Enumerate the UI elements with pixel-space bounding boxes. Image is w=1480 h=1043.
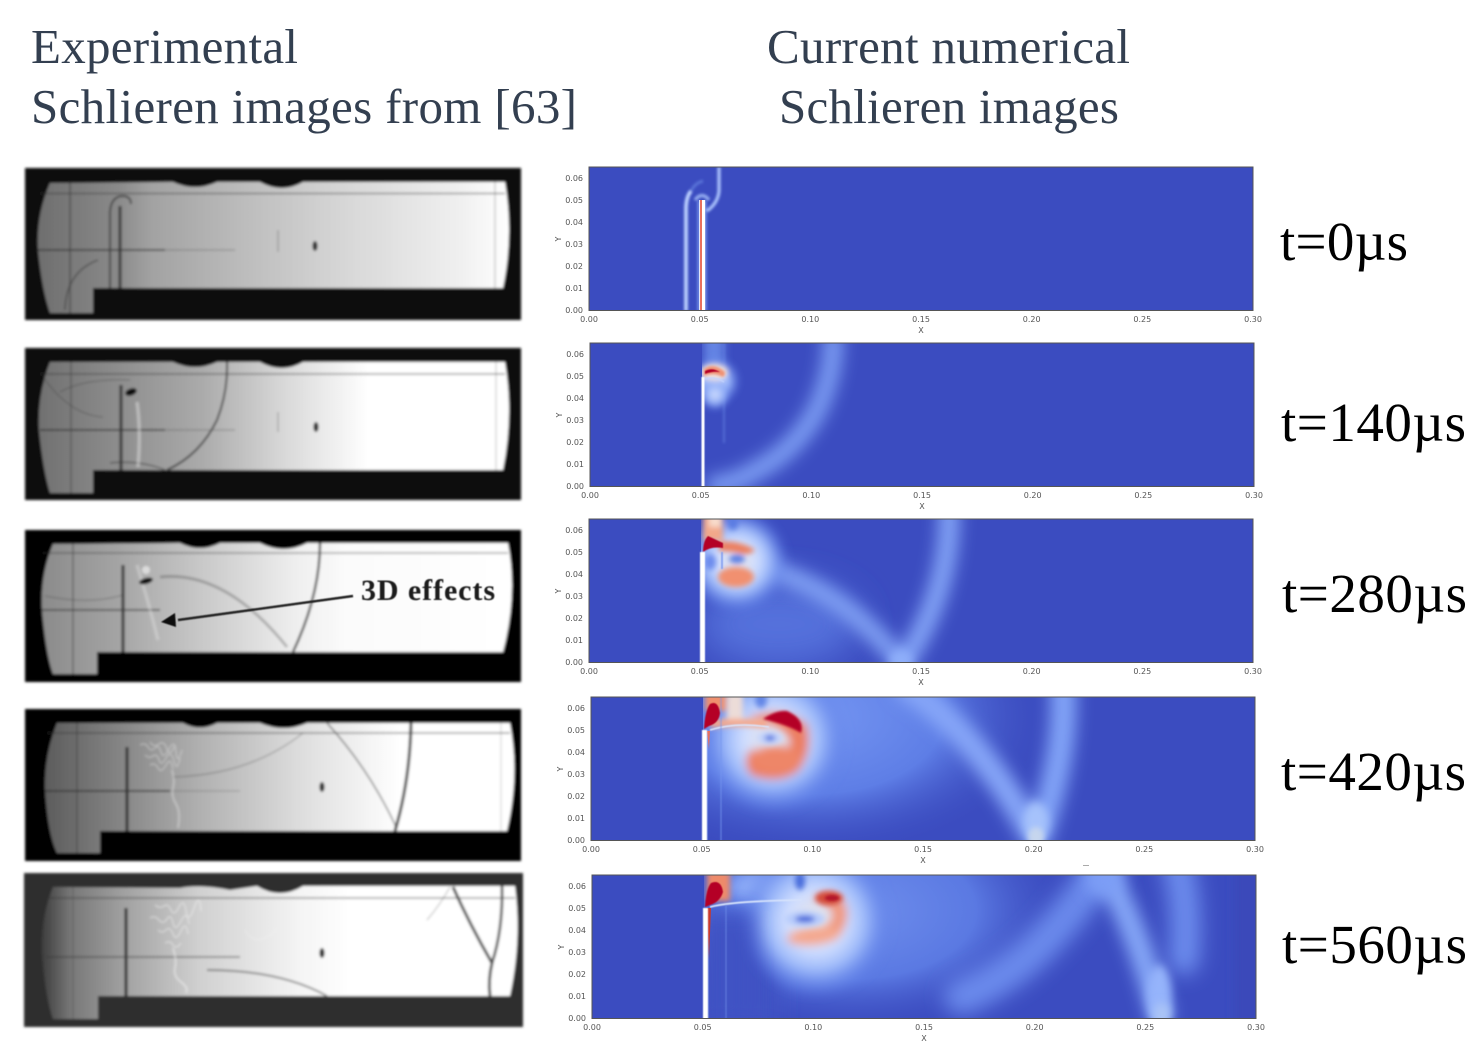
- numerical plot: t=140: [555, 333, 1263, 511]
- axis labels t=280: 0.20: [1023, 667, 1041, 676]
- axis labels t=560: 0.10: [804, 1023, 822, 1032]
- title: numerical: Schlieren images: [779, 79, 1119, 134]
- axis labels t=0: 0.02: [565, 262, 583, 271]
- axis labels t=140: 0.06: [566, 350, 584, 359]
- axes frame: [591, 697, 1255, 840]
- axis labels t=280: 0.03: [565, 592, 583, 601]
- axis labels t=560: 0.03: [568, 948, 586, 957]
- title: experimental: [31, 19, 577, 134]
- axis labels t=420: 0.06: [567, 704, 585, 713]
- axis labels t=140: 0.15: [913, 491, 931, 500]
- heatmap t=420: [592, 698, 1254, 840]
- axis labels t=560: 0.15: [915, 1023, 933, 1032]
- experimental image: t=140: [25, 348, 521, 500]
- axis labels t=560: 0.01: [568, 992, 586, 1001]
- axis labels t=0: 0.03: [565, 240, 583, 249]
- axes frame: [589, 519, 1253, 662]
- axis labels t=0: Y: [554, 236, 563, 242]
- axis labels t=420: 0.20: [1025, 845, 1043, 854]
- axis labels t=560: 0.02: [568, 970, 586, 979]
- axis labels t=560: X: [921, 1034, 927, 1043]
- axis labels t=140: Y: [555, 412, 564, 418]
- axes frame: [592, 875, 1256, 1018]
- axis labels t=140: 0.01: [566, 460, 584, 469]
- axis labels t=140: 0.00: [566, 482, 584, 491]
- experimental image: t=560: [24, 873, 523, 1027]
- axis labels t=0: [554, 174, 1262, 335]
- axis labels t=140: 0.30: [1245, 491, 1263, 500]
- axis labels t=140: 0.10: [802, 491, 820, 500]
- axis labels t=140: [555, 350, 1263, 511]
- axis labels t=0: 0.00: [580, 315, 598, 324]
- axis labels t=560: 0.04: [568, 926, 586, 935]
- callout: 3D effects arrow: 3D effects: [361, 574, 495, 607]
- axis labels t=560: [557, 882, 1265, 1043]
- axis labels t=140: 0.05: [692, 491, 710, 500]
- axis labels t=560: 0.06: [568, 882, 586, 891]
- experimental image: t=280: [25, 530, 521, 682]
- axis labels t=140: 0.02: [566, 438, 584, 447]
- axis labels t=0: 0.06: [565, 174, 583, 183]
- axis labels t=140: 0.20: [1024, 491, 1042, 500]
- axis labels t=560: Y: [557, 944, 566, 950]
- axis labels t=560: 0.05: [568, 904, 586, 913]
- axis labels t=420: 0.01: [567, 814, 585, 823]
- axis labels t=0: 0.30: [1244, 315, 1262, 324]
- axis labels t=0: 0.10: [801, 315, 819, 324]
- time label: t=420: t=420µs: [1281, 741, 1466, 802]
- axis labels t=280: 0.25: [1133, 667, 1151, 676]
- heatmap t=280: [590, 520, 1252, 662]
- axis labels t=560: 0.20: [1026, 1023, 1044, 1032]
- stray mark: [1083, 865, 1089, 866]
- axis labels t=560: 0.25: [1136, 1023, 1154, 1032]
- axis labels t=0: 0.05: [565, 196, 583, 205]
- axis labels t=420: 0.02: [567, 792, 585, 801]
- axis labels t=280: 0.01: [565, 636, 583, 645]
- axis labels t=420: 0.30: [1246, 845, 1264, 854]
- axis labels t=0: X: [918, 326, 924, 335]
- axis labels t=0: 0.20: [1023, 315, 1041, 324]
- time label: t=0: t=0µs: [1280, 211, 1408, 272]
- axis labels t=140: 0.05: [566, 372, 584, 381]
- experimental image: t=0: [25, 168, 521, 320]
- axes frame: [589, 167, 1253, 310]
- axis labels t=420: 0.00: [567, 836, 585, 845]
- axis labels t=420: [556, 704, 1264, 865]
- heatmap t=140: [590, 333, 1254, 487]
- numerical plot: t=420: [557, 696, 1264, 863]
- axis labels t=140: X: [919, 502, 925, 511]
- axis labels t=280: [554, 526, 1262, 687]
- title: numerical: [767, 19, 1130, 134]
- axis labels t=280: 0.05: [565, 548, 583, 557]
- axis labels t=560: 0.00: [583, 1023, 601, 1032]
- axis labels t=280: 0.04: [565, 570, 583, 579]
- axis labels t=280: 0.00: [580, 667, 598, 676]
- axis labels t=280: Y: [554, 588, 563, 594]
- axis labels t=140: 0.25: [1134, 491, 1152, 500]
- experimental image: t=420: [25, 709, 521, 861]
- numerical plot: t=280: [554, 509, 1262, 687]
- axis labels t=420: 0.10: [803, 845, 821, 854]
- time label: t=280: t=280µs: [1282, 563, 1467, 624]
- title: experimental: Experimental: [31, 19, 298, 74]
- axis labels t=280: 0.06: [565, 526, 583, 535]
- axis labels t=140: 0.00: [581, 491, 599, 500]
- axis labels t=0: 0.15: [912, 315, 930, 324]
- numerical plot: t=560: [558, 874, 1264, 1041]
- axis labels t=420: 0.03: [567, 770, 585, 779]
- title: numerical: Current numerical: [767, 19, 1130, 74]
- axis labels t=0: 0.00: [565, 306, 583, 315]
- axis labels t=560: 0.00: [568, 1014, 586, 1023]
- axis labels t=0: 0.25: [1133, 315, 1151, 324]
- axis labels t=280: X: [918, 678, 924, 687]
- axis labels t=420: X: [920, 856, 926, 865]
- heatmap t=0: [589, 167, 1253, 311]
- axis labels t=280: 0.30: [1244, 667, 1262, 676]
- callout: 3D effects arrow: [161, 574, 495, 627]
- heatmap t=560: [592, 876, 1256, 1018]
- axis labels t=420: 0.05: [567, 726, 585, 735]
- axis labels t=0: 0.01: [565, 284, 583, 293]
- axis labels t=140: 0.03: [566, 416, 584, 425]
- axis labels t=420: 0.00: [582, 845, 600, 854]
- axis labels t=280: 0.05: [691, 667, 709, 676]
- axis labels t=0: 0.04: [565, 218, 583, 227]
- time label: t=560: t=560µs: [1282, 914, 1467, 975]
- axis labels t=560: 0.30: [1247, 1023, 1265, 1032]
- axis labels t=140: 0.04: [566, 394, 584, 403]
- axis labels t=420: Y: [556, 766, 565, 772]
- axis labels t=280: 0.15: [912, 667, 930, 676]
- time label: t=140: t=140µs: [1281, 392, 1466, 453]
- numerical plot: t=0: [554, 167, 1262, 335]
- axis labels t=420: 0.04: [567, 748, 585, 757]
- axis labels t=420: 0.05: [693, 845, 711, 854]
- axis labels t=280: 0.02: [565, 614, 583, 623]
- axis labels t=420: 0.25: [1135, 845, 1153, 854]
- axis labels t=560: 0.05: [694, 1023, 712, 1032]
- axis labels t=0: 0.05: [691, 315, 709, 324]
- axis labels t=280: 0.00: [565, 658, 583, 667]
- axis labels t=280: 0.10: [801, 667, 819, 676]
- axis labels t=420: 0.15: [914, 845, 932, 854]
- title: experimental: Schlieren images from [63]: [31, 79, 577, 134]
- axes frame: [590, 343, 1254, 486]
